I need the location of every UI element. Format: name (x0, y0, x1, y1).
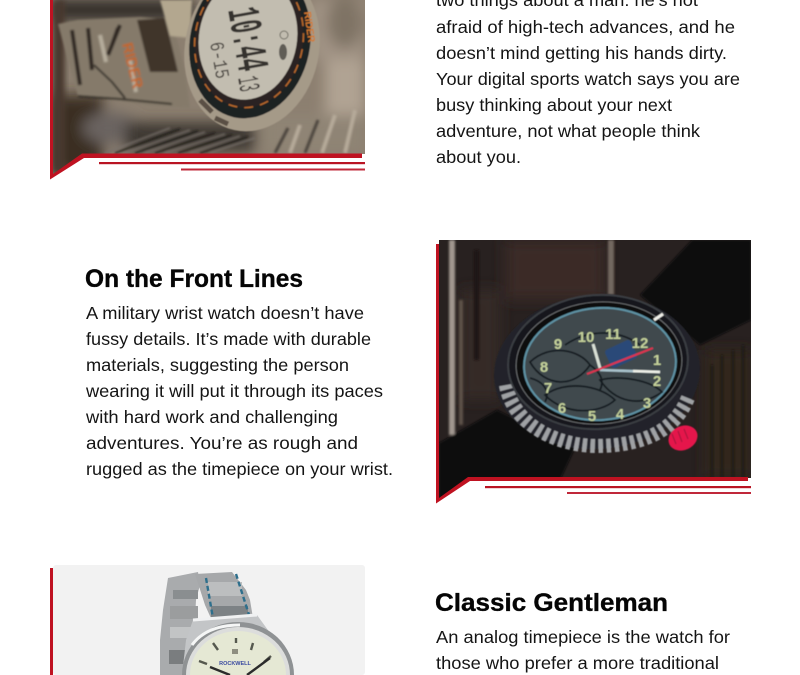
heading: On the Front Lines: On the Front Lines (85, 265, 303, 293)
red frame (50, 0, 365, 180)
watch: 10 (578, 329, 594, 346)
heading: Classic Gentleman: Classic Gentleman (435, 589, 668, 617)
strap (58, 0, 192, 108)
red frame (436, 244, 751, 504)
text block: military watch: wearing it will put it through its paces (85, 381, 383, 401)
text block: digital sports watch: afraid of high-tech advances, and he (436, 17, 735, 37)
watch: 7 (544, 380, 552, 397)
watch case: 13 (228, 74, 264, 95)
bracelet front (198, 572, 252, 618)
watch case: 10:44 (214, 3, 277, 75)
photo: steel analog watch (50, 565, 365, 675)
case (183, 615, 268, 664)
photo: military watch on wood (436, 240, 751, 504)
text block: military watch: with hard work and challenging (85, 407, 338, 427)
photo: steel analog watch: ROCKWELL (219, 661, 252, 667)
text block: military watch: fussy details. It’s made with durable (86, 329, 371, 349)
text block: military watch: materials, suggesting the person (86, 355, 349, 375)
text block: digital sports watch (436, 0, 740, 167)
wood lines right (712, 345, 743, 478)
watch case: 6-15 (203, 40, 232, 81)
watch: 4 (616, 406, 625, 423)
watch: 12 (632, 335, 648, 352)
watch case (184, 0, 320, 132)
text block: analog watch: those who prefer a more traditional (436, 653, 719, 673)
text block: military watch (85, 303, 393, 479)
text block: military watch: rugged as the timepiece on your wrist. (86, 459, 393, 479)
photo: digital sports watch on wood (50, 0, 365, 180)
text block: analog watch: An analog timepiece is the watch for (436, 627, 730, 647)
text block: digital sports watch: busy thinking about your next (436, 95, 672, 115)
text block: digital sports watch: doesn’t mind getting his hands dirty. (436, 43, 727, 63)
watch: 11 (605, 326, 621, 343)
watch: 9 (554, 336, 562, 353)
text block: military watch: adventures. You’re as rough and (86, 433, 358, 453)
watch: 8 (540, 359, 548, 376)
strap: RIDER (118, 41, 146, 90)
text block: digital sports watch: about you. (436, 147, 521, 167)
bracelet back (160, 572, 200, 675)
watch: 1 (653, 352, 661, 369)
watch: 5 (588, 408, 596, 425)
watch: 3 (643, 395, 651, 412)
text block: digital sports watch: Your digital sports watch says you are (436, 69, 740, 89)
text block: digital sports watch: adventure, not what people think (436, 121, 700, 141)
watch: 2 (653, 373, 661, 390)
watch: 6 (558, 400, 566, 417)
text block: military watch: A military wrist watch doesn’t have (86, 303, 364, 323)
watch case: RIDER (301, 11, 316, 44)
watch (489, 288, 705, 456)
text block: analog watch (436, 627, 730, 673)
red frame (50, 568, 53, 675)
wood grain (105, 110, 355, 153)
